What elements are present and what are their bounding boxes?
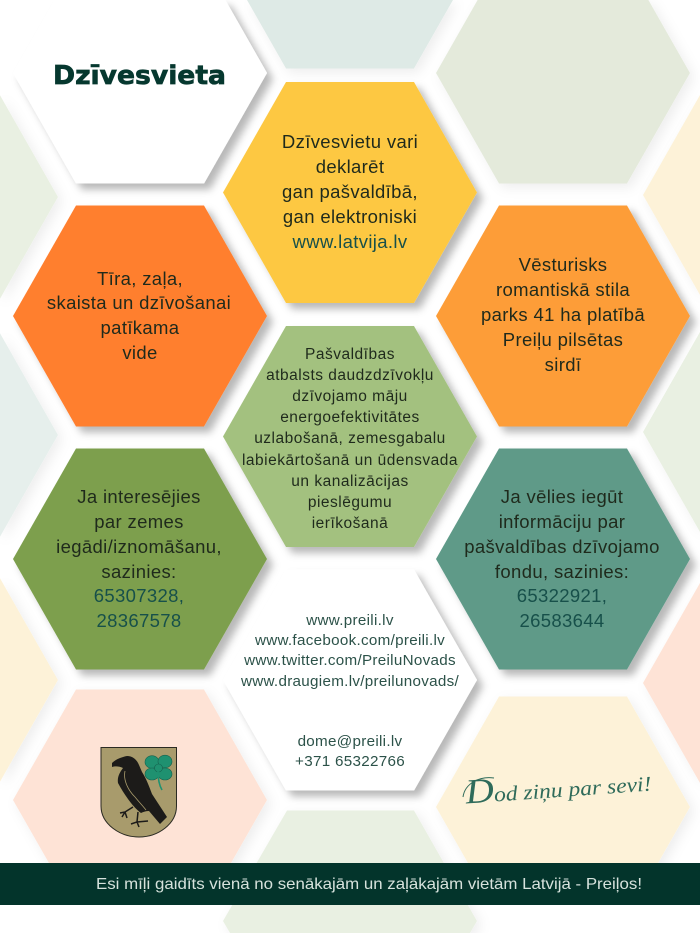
text block: links: www.facebook.com/preili.lv (254, 632, 445, 649)
background hexagon: far right middle (643, 332, 700, 532)
script slogan: Dod ziņu par sevi! (463, 760, 652, 812)
text block: gan pašvaldībā, (282, 181, 418, 202)
text block: fondu, sazinies: (495, 561, 629, 582)
text block: dzīvojamo māju (292, 388, 408, 405)
text block: Tīra, zaļa, (97, 268, 183, 289)
background hexagon: far left middle (0, 333, 58, 537)
text block: un kanalizācijas (291, 473, 409, 490)
panel: clean environment (13, 206, 267, 426)
text block: 65322921, (517, 585, 607, 606)
text block: parks 41 ha platībā (481, 304, 645, 325)
text block: skaista un dzīvošanai (47, 292, 231, 313)
text block: sazinies: (101, 561, 177, 582)
text block: ierīkošanā (312, 515, 388, 532)
text block (47, 268, 231, 363)
text block (242, 346, 458, 532)
text block: gan elektroniski (283, 206, 417, 227)
text block: www.latvija.lv (292, 231, 408, 252)
panel: land purchase (13, 448, 267, 670)
background hexagon: far right top (643, 95, 700, 295)
panel: crest hexagon (13, 690, 267, 885)
text block: pieslēgumu (308, 494, 392, 511)
text block: Vēsturisks (519, 254, 607, 275)
background hexagon: far left top (0, 95, 58, 299)
banner text: Esi mīļi gaidīts vienā no senākajām un zaļākajām vietām Latvijā - Preiļos! (96, 876, 642, 893)
text block: informāciju par (499, 511, 625, 532)
text block: links: www.draugiem.lv/preilunovads/ (240, 673, 460, 690)
text block: deklarēt (316, 156, 384, 177)
text block: Preiļu pilsētas (503, 329, 623, 350)
text block: Pašvaldības (305, 346, 395, 363)
text block: atbalsts daudzdzīvokļu (266, 367, 434, 384)
background hexagon: bottom centre (223, 810, 477, 933)
text block: email and phone (295, 733, 405, 770)
text block (282, 131, 418, 252)
text block: par zemes (94, 511, 184, 532)
text block: energoefektivitātes (280, 409, 420, 426)
text block: links: www.twitter.com/PreiluNovads (243, 652, 456, 669)
panel: housing fund (436, 448, 690, 670)
text block: vide (122, 342, 158, 363)
panel: historic park (436, 206, 690, 426)
panel: title (13, 0, 267, 184)
text block: 26583644 (519, 610, 605, 631)
icon: coat of arms (101, 748, 176, 837)
text block: Ja vēlies iegūt (501, 486, 623, 507)
text block: labiekārtošanā un ūdensvada (242, 452, 458, 469)
panel: declare residence (223, 82, 477, 303)
text block: email and phone: dome@preili.lv (298, 733, 403, 750)
text block (56, 486, 222, 631)
background hexagon: far left bottom (0, 578, 58, 782)
text block (464, 486, 660, 631)
background hexagon: top centre (247, 0, 453, 68)
text block: patīkama (101, 317, 180, 338)
text block: 28367578 (96, 610, 182, 631)
panel: municipal support (223, 326, 477, 547)
background hexagon: far right bottom (643, 583, 700, 783)
text block: romantiskā stila (496, 279, 630, 300)
background hexagon: top right (436, 0, 690, 184)
text block (481, 254, 645, 375)
text block: Ja interesējies (77, 486, 201, 507)
text block: sirdī (545, 354, 582, 375)
text block: iegādi/iznomāšanu, (56, 536, 222, 557)
banner (0, 863, 700, 905)
panel: contacts (223, 570, 477, 790)
text block: pašvaldības dzīvojamo (464, 536, 660, 557)
text block: Dzīvesvietu vari (282, 131, 418, 152)
panel: slogan hexagon (436, 696, 690, 885)
text block: 65307328, (94, 585, 184, 606)
heading: Dzīvesvieta (53, 61, 226, 91)
text block: links: www.preili.lv (305, 612, 394, 629)
text block: uzlabošanā, zemesgabalu (254, 430, 446, 447)
text block: email and phone: +371 65322766 (295, 753, 405, 770)
text block: links (240, 612, 460, 690)
